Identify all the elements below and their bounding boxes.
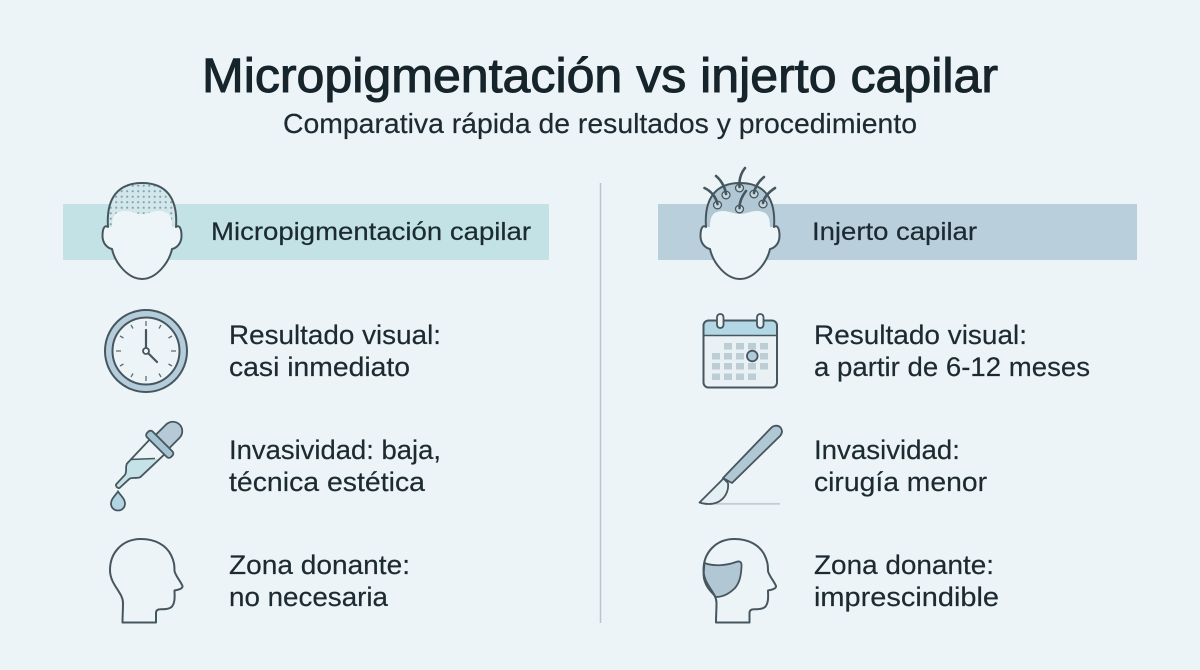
text: invasividad: técnica estética <box>229 467 426 497</box>
text: resultado visual: Resultado visual: <box>229 320 441 350</box>
text: resultado visual: casi inmediato <box>229 352 410 382</box>
panel: micropigmentación capilar <box>63 183 549 622</box>
text: zona donante: Zona donante: <box>814 550 994 580</box>
text: resultado visual <box>814 320 1090 382</box>
text: resultado visual: a partir de 6-12 meses <box>814 352 1090 382</box>
hair grafts <box>704 168 775 213</box>
subtitle: Comparativa rápida de resultados y procedimiento <box>283 108 917 139</box>
icon: scalpel <box>700 426 782 504</box>
icon: head profile <box>110 539 183 622</box>
text: zona donante: Zona donante: <box>229 550 410 580</box>
text: invasividad: cirugía menor <box>814 467 987 497</box>
icon: clock <box>105 310 187 392</box>
column heading: Micropigmentación capilar <box>211 218 531 246</box>
icon: head profile with donor zone <box>704 539 776 622</box>
column header band <box>658 204 1137 260</box>
text: resultado visual: Resultado visual: <box>814 320 1027 350</box>
icon: head with hair grafts <box>700 168 780 279</box>
text: invasividad: Invasividad: baja, <box>229 435 441 465</box>
icon: calendar <box>704 314 777 388</box>
panel: injerto capilar <box>658 168 1137 622</box>
title: Micropigmentación vs injerto capilar <box>202 50 998 103</box>
text: invasividad: Invasividad: <box>814 435 960 465</box>
text: zona donante <box>814 550 999 612</box>
text: invasividad <box>814 435 987 497</box>
text: zona donante: no necesaria <box>229 582 389 612</box>
text: invasividad <box>229 435 441 497</box>
column heading: Injerto capilar <box>812 218 977 246</box>
column header band <box>63 204 549 260</box>
icon: head with micropigmented hairline <box>102 183 182 279</box>
text: zona donante: imprescindible <box>814 582 999 612</box>
icon: dropper <box>110 418 186 510</box>
text: zona donante <box>229 550 410 612</box>
text: resultado visual <box>229 320 441 382</box>
divider <box>600 183 602 623</box>
